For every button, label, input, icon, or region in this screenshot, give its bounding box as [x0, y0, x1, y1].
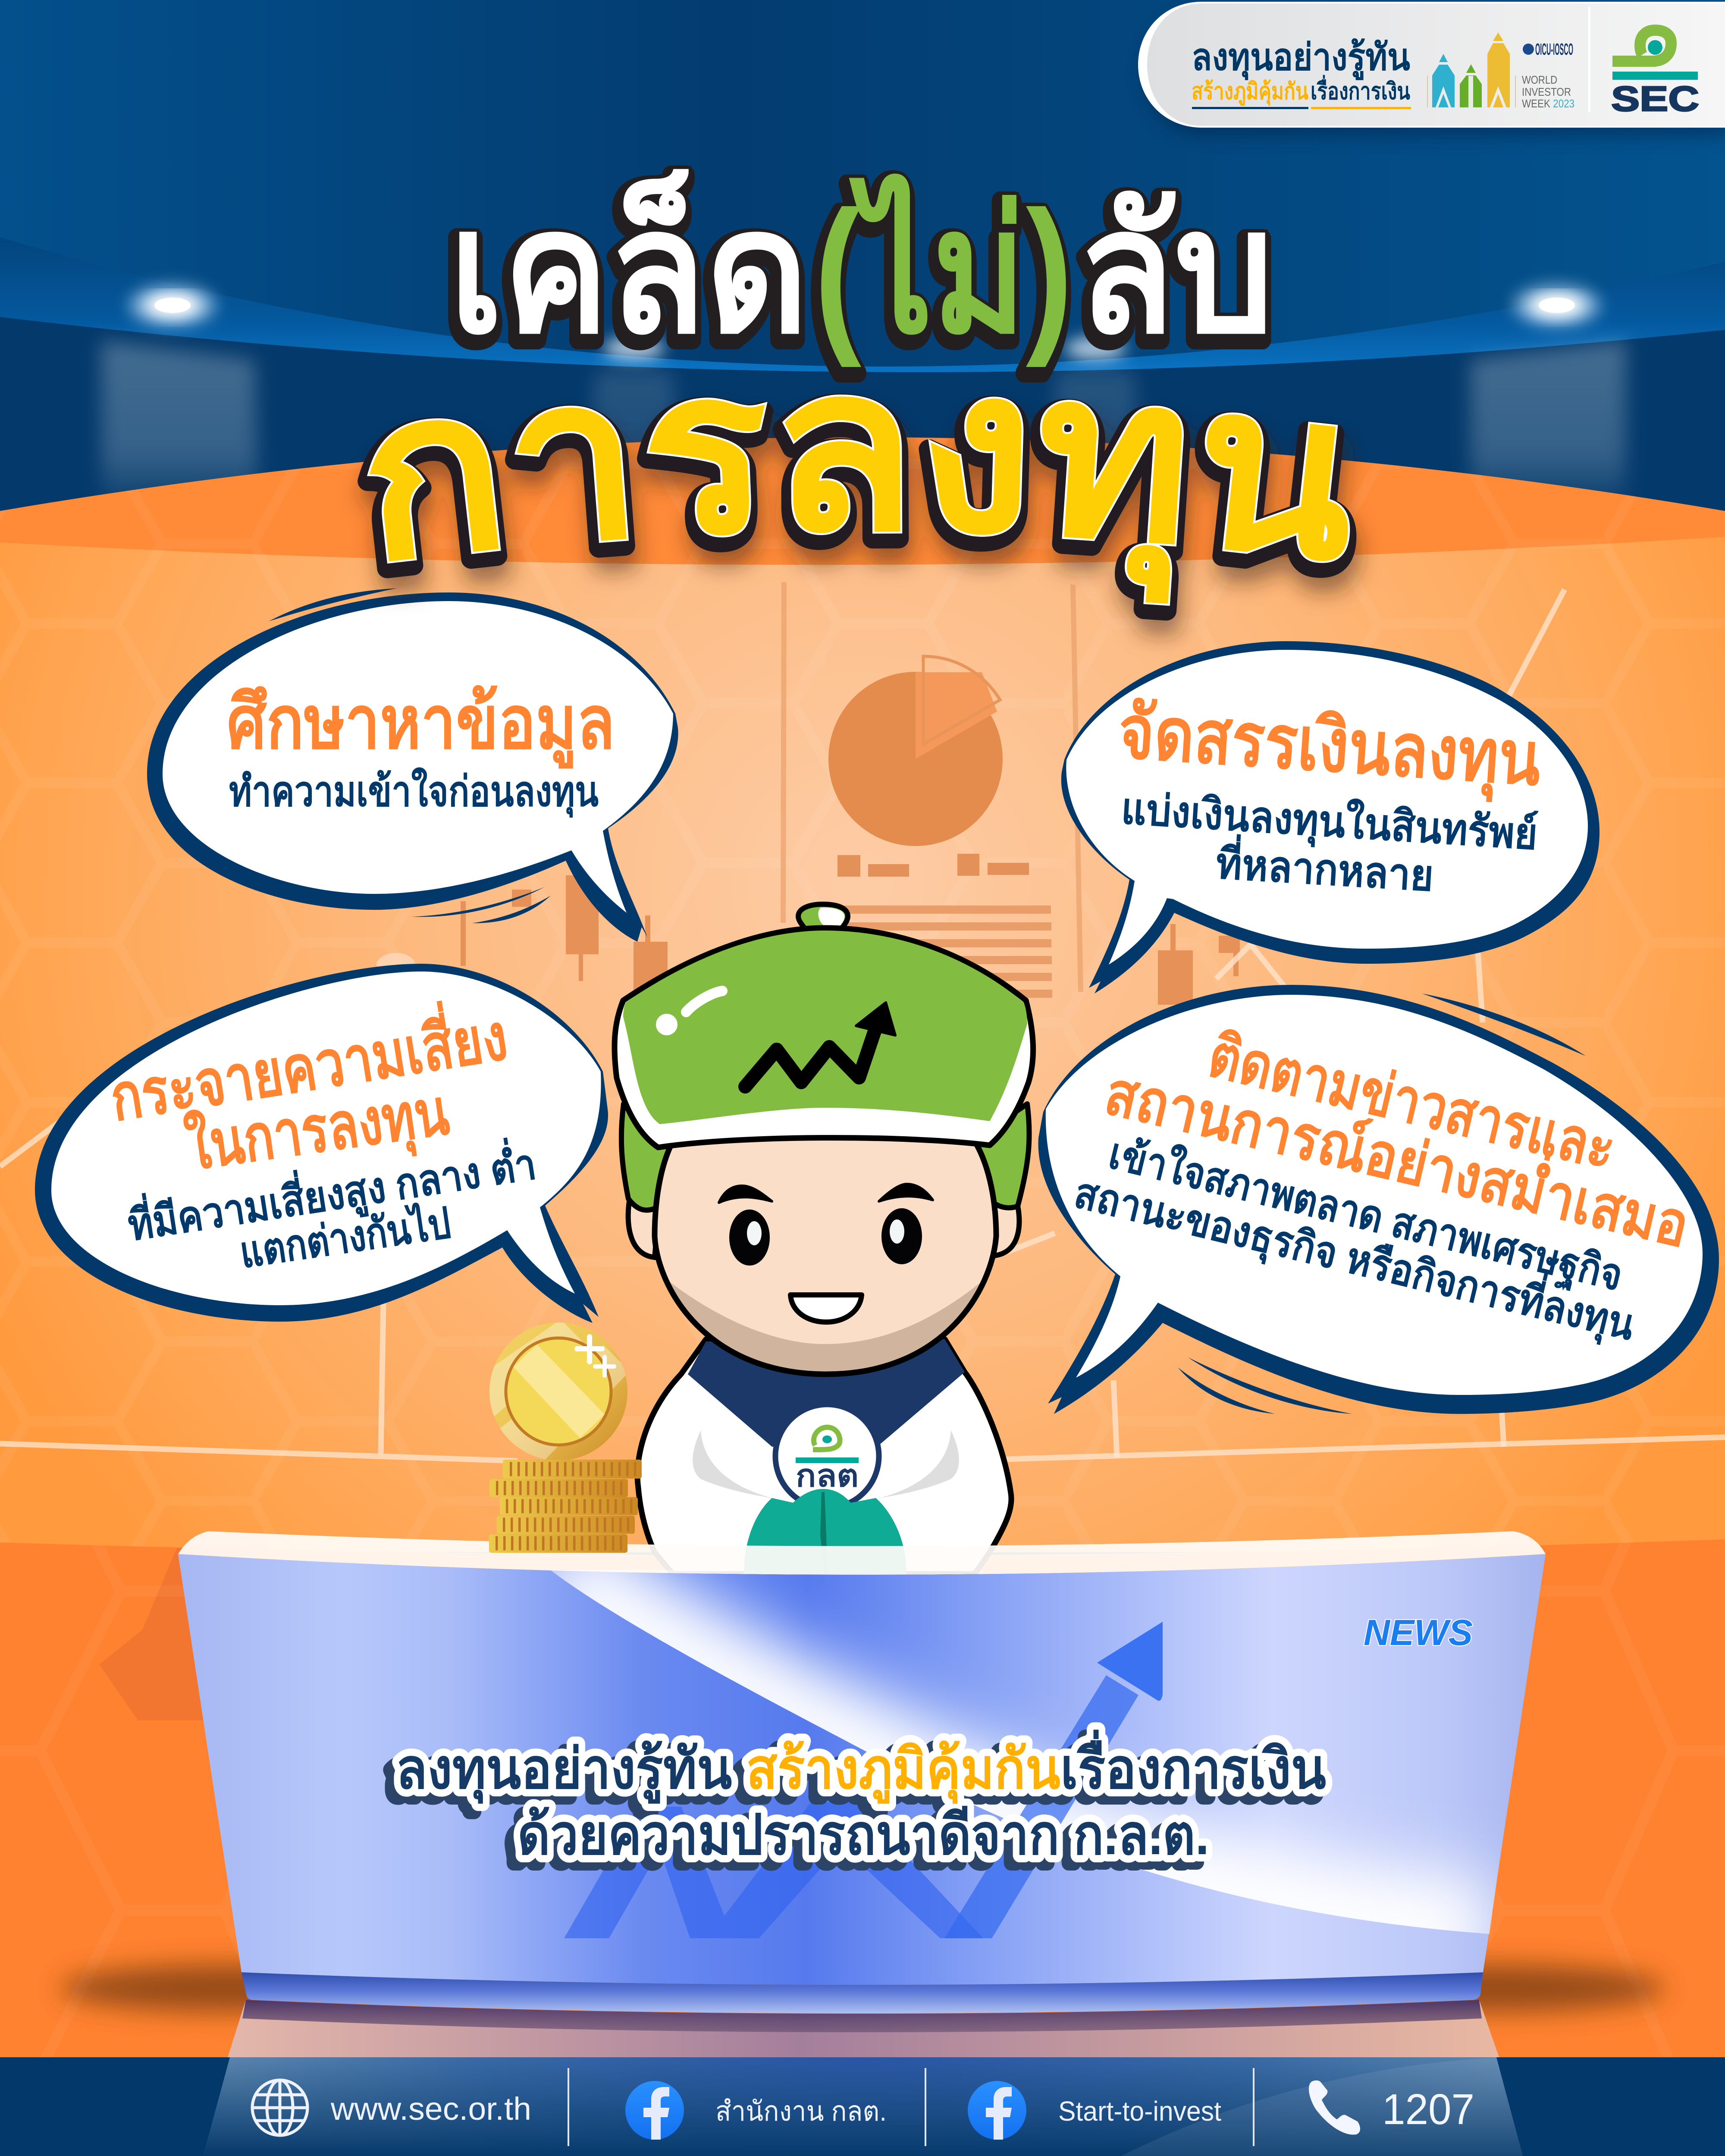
campaign wordmark: เรื่องการเงิน — [1311, 75, 1410, 104]
hair and ears — [621, 1104, 1029, 1257]
facebook start-to-invest: Start-to-invest — [1058, 2096, 1221, 2127]
face — [647, 1138, 1000, 1380]
title line 1: (ไม่) — [812, 178, 1070, 375]
title line 1: ลับ — [1076, 181, 1271, 374]
hotline — [1309, 2081, 1474, 2135]
desk front — [178, 1554, 1546, 1985]
SEC logo: SEC — [1611, 79, 1699, 119]
desk top — [178, 1531, 1546, 1575]
bubble: จัดสรรเงินลงทุน: จัดสรรเงินลงทุน — [1116, 690, 1543, 805]
title line 1: ลับ — [1078, 175, 1274, 368]
desk floor shadows — [60, 1965, 1665, 2012]
facebook start-to-invest — [968, 2081, 1221, 2140]
world investor week: WEEK 2023 — [1522, 97, 1574, 110]
bubble: ติดตามข่าวสาร — [1038, 985, 1719, 1414]
world investor week: INVESTOR — [1522, 85, 1571, 98]
title line 1: (ไม่) — [814, 172, 1073, 369]
OICU-IOSCO logo — [1523, 41, 1573, 59]
title line 1: เคล็ด — [449, 167, 809, 368]
coins — [474, 1319, 642, 1553]
badge logo — [796, 1427, 859, 1493]
desk lip — [242, 1972, 1483, 2013]
title line 1 — [446, 167, 1274, 375]
desk message: ด้วยความปรารถนาดีจาก ก.ล.ต. — [518, 1803, 1209, 1866]
footer bar — [0, 2057, 1725, 2156]
hat — [615, 904, 1033, 1147]
desk swoosh — [550, 1570, 1490, 1934]
desk message: ลงทุนอย่างรู้ทัน สร้างภูมิคุ้มกันเรื่องการเงิน — [387, 1737, 1317, 1812]
desk message: ลงทุนอย่างรู้ทัน สร้างภูมิคุ้มกันเรื่องการเงิน — [396, 1730, 1326, 1804]
background: orange floor — [0, 1539, 1725, 2057]
hotline: 1207 — [1382, 2085, 1474, 2134]
campaign wordmark: สร้างภูมิคุ้มกัน — [1192, 78, 1308, 106]
campaign wordmark — [1192, 37, 1411, 109]
character body — [637, 1339, 1011, 1574]
background: blue ceiling — [0, 0, 1725, 604]
rising arrow — [564, 1622, 1163, 1938]
bubble: กระจายความเสี่ยง: ที่มีความเสี่ยงสูง กลาง ต่ำ — [124, 1134, 539, 1253]
bubble: ศึกษาหาข้อมูล — [147, 588, 678, 942]
bubble: กระจายความเสี่ยง — [35, 964, 608, 1323]
website: www.sec.or.th — [330, 2091, 531, 2127]
title line 2: การลงทุน — [348, 321, 1371, 608]
desk message — [387, 1730, 1326, 1874]
world investor week — [1522, 73, 1574, 110]
desk message: ด้วยความปรารถนาดีจาก ก.ล.ต. — [509, 1811, 1201, 1874]
character: mascot — [615, 904, 1033, 1574]
bubble: จัดสรรเงินลงทุน — [1061, 641, 1600, 993]
facebook office: สำนักงาน กลต. — [715, 2096, 887, 2127]
bubble: กระจายความเสี่ยง: ในการลงทุน — [181, 1075, 454, 1188]
top-right campaign badge — [1138, 2, 1725, 137]
hands — [744, 1489, 906, 1574]
badge logo: กลต — [796, 1459, 859, 1493]
pencils logo — [1427, 32, 1515, 107]
bubble: ศึกษาหาข้อมูล: ทำความเข้าใจก่อนลงทุน — [229, 768, 599, 818]
bubble: ติดตามข่าวสาร: ติดตามข่าวสารและ — [1202, 1021, 1622, 1183]
bubble: ติดตามข่าวสาร: สถานะของธุรกิจ หรือกิจการที่ลงทุน — [1069, 1162, 1641, 1352]
top-right campaign badge: OICU-IOSCO — [1535, 41, 1573, 59]
background: chart decoration — [0, 582, 1725, 1461]
website — [252, 2080, 531, 2135]
bubble: ศึกษาหาข้อมูล: ศึกษาหาข้อมูล — [227, 681, 615, 769]
bubble: จัดสรรเงินลงทุน: แบ่งเงินลงทุนในสินทรัพย์ — [1120, 783, 1539, 862]
bubble: กระจายความเสี่ยง: แตกต่างกันไป — [237, 1198, 454, 1277]
NEWS label: NEWS — [1364, 1612, 1473, 1653]
title line 2: การลงทุน — [346, 328, 1369, 615]
desk message: ลงทุนอย่างรู้ทัน สร้างภูมิคุ้มกันเรื่องการเงิน — [396, 1730, 1326, 1804]
desk message: ด้วยความปรารถนาดีจาก ก.ล.ต. — [518, 1803, 1209, 1866]
desk reflection — [228, 2000, 1499, 2057]
bubble: จัดสรรเงินลงทุน: ที่หลากหลาย — [1215, 833, 1435, 900]
news desk — [178, 1531, 1546, 2057]
facebook office — [625, 2081, 887, 2140]
title line 1: เคล็ด — [446, 173, 806, 374]
background: orange stage — [0, 437, 1725, 1552]
SEC logo — [1611, 30, 1699, 119]
bubble: กระจายความเสี่ยง: กระจายความเสี่ยง — [104, 991, 512, 1134]
bubble: ติดตามข่าวสาร: เข้าใจสภาพตลาด สภาพเศรษฐกิจ — [1104, 1128, 1628, 1304]
campaign wordmark: ลงทุนอย่างรู้ทัน — [1192, 37, 1410, 80]
world investor week: WORLD — [1522, 73, 1557, 86]
spotlights — [101, 285, 1626, 513]
